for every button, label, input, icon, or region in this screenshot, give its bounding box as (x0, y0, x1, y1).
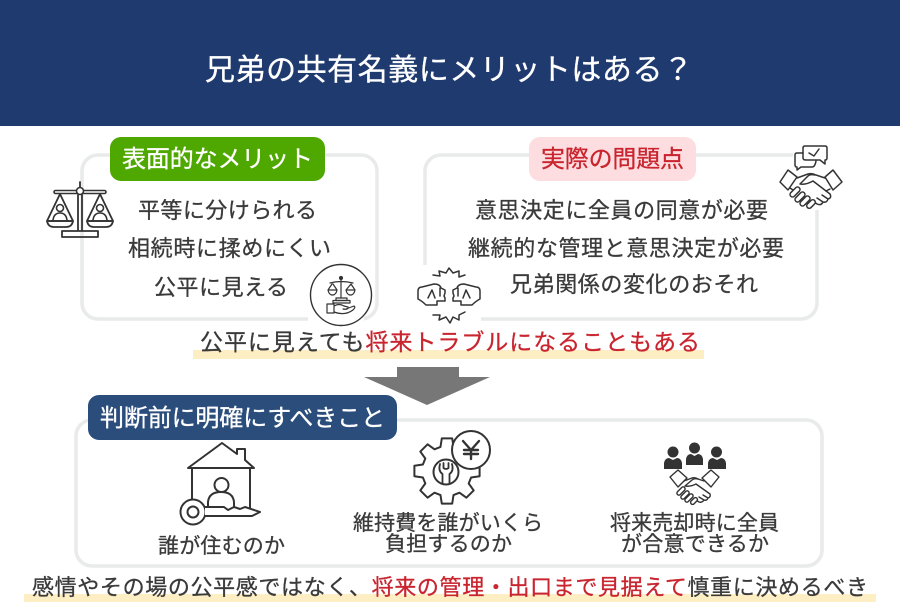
icon: house with person and key (180, 443, 260, 524)
merit list: 相続時に揉めにくい (128, 236, 331, 261)
problems list: 意思決定に全員の同意が必要 (475, 198, 768, 223)
arrow: down (364, 367, 490, 405)
badge: superficial merits: 表面的なメリット (122, 146, 313, 173)
item: agreement at sale: が合意できるか (621, 533, 769, 556)
item: who lives there: 誰が住むのか (158, 535, 285, 558)
panel: what to clarify (76, 395, 822, 566)
panel: actual problems (400, 137, 846, 327)
icon: handshake with speech bubbles (780, 146, 842, 209)
problems list (468, 198, 784, 297)
merit list: 公平に見える (154, 275, 288, 300)
item: who lives there (158, 443, 285, 558)
badge: what to clarify (88, 395, 397, 440)
badge: actual problems: 実際の問題点 (541, 146, 684, 173)
icon: balance scale with people (47, 182, 113, 237)
item: agreement at sale (610, 442, 779, 556)
badge: actual problems (529, 137, 696, 181)
icon: gear with wrench and yen coin (414, 431, 490, 504)
problems list: 継続的な管理と意思決定が必要 (468, 236, 784, 261)
icon: clashing fists (418, 268, 480, 323)
title: 兄弟の共有名義にメリットはある？ (205, 54, 693, 87)
emphasis line: fair but trouble: 公平に見えても将来トラブルになることもある (200, 329, 700, 355)
merit list (128, 198, 331, 300)
item: agreement at sale: 将来売却時に全員 (610, 512, 779, 535)
item: maintenance cost: 維持費を誰がいくら (353, 512, 543, 535)
conclusion line: 感情やその場の公平感ではなく、将来の管理・出口まで見据えて慎重に決めるべき (32, 575, 868, 600)
item: maintenance cost (353, 431, 543, 556)
panel: superficial merits (47, 137, 377, 326)
badge: what to clarify: 判断前に明確にすべきこと (100, 405, 385, 432)
icon: three people above handshake (664, 442, 726, 505)
header band (0, 0, 900, 126)
merit list: 平等に分けられる (138, 198, 317, 223)
badge: superficial merits (110, 137, 325, 181)
problems list: 兄弟関係の変化のおそれ (510, 272, 758, 297)
item: maintenance cost: 負担するのか (385, 533, 512, 556)
icon: scale on hand in circle (310, 264, 372, 326)
